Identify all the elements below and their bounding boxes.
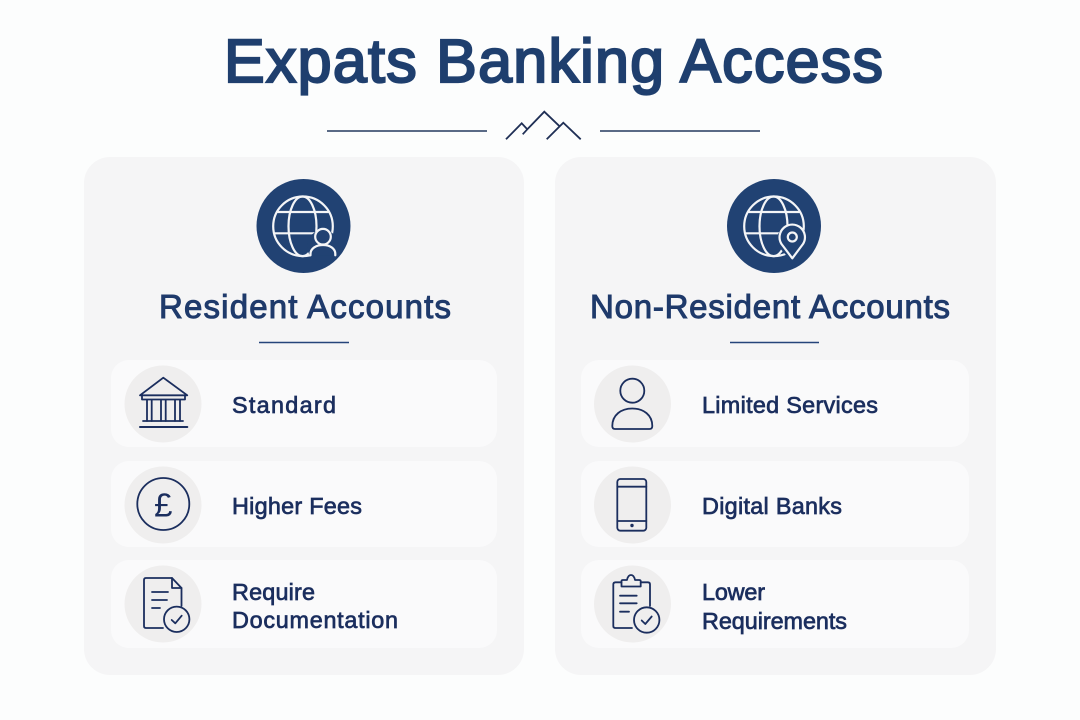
row: lower requirements: Requirements (702, 608, 847, 634)
icon: phone (617, 479, 646, 531)
heading: resident accounts: Resident Accounts (159, 288, 451, 325)
heading: non-resident accounts: Non-Resident Accounts (590, 288, 950, 325)
title ornament: mountains with rules (327, 112, 760, 139)
row: lower requirements (581, 560, 969, 648)
row: lower requirements: Lower (702, 579, 765, 605)
icon: pound coin (137, 478, 189, 530)
row: standard: Standard (232, 392, 336, 418)
icon: document check (144, 578, 189, 632)
icon: person (612, 379, 652, 429)
icon: globe with location pin (727, 179, 821, 273)
panel: non-resident accounts (555, 157, 996, 675)
icon: pound coin: £ (154, 486, 172, 524)
panel: resident accounts (84, 157, 524, 675)
row: require documentation: Require (232, 579, 315, 605)
icon: globe with person (256, 179, 350, 273)
row: require documentation: Documentation (232, 607, 398, 633)
icon: bank (140, 378, 187, 427)
row: require documentation (111, 560, 497, 648)
row: limited services (581, 360, 969, 447)
row: higher fees: Higher Fees (232, 493, 362, 519)
title: Expats Banking Access (224, 27, 883, 95)
icon: clipboard check (613, 575, 659, 633)
row: digital banks (581, 461, 969, 547)
row: higher fees (111, 461, 497, 547)
row: standard (111, 360, 497, 447)
row: limited services: Limited Services (702, 392, 878, 418)
row: digital banks: Digital Banks (702, 493, 842, 519)
